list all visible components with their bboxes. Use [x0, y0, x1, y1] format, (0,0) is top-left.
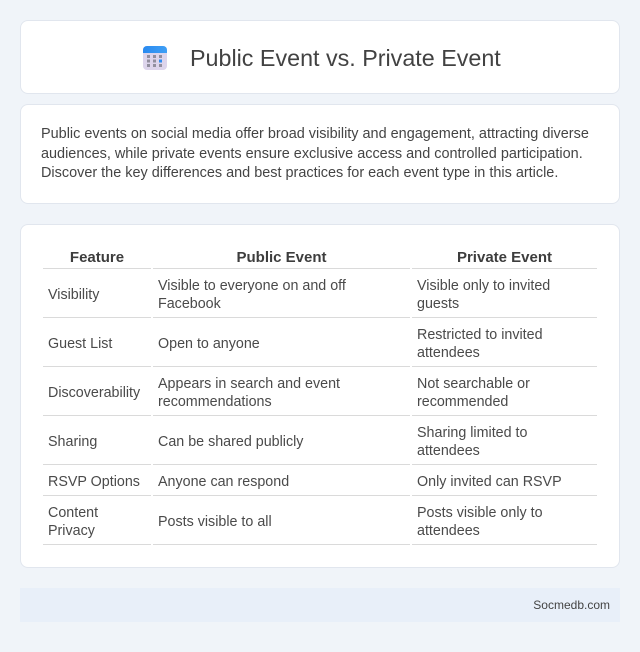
comparison table: Facebook	[158, 296, 221, 312]
header: Private Event: Private Event	[457, 249, 552, 266]
comparison table: recommended	[417, 394, 508, 410]
comparison table: Posts visible only to	[417, 505, 543, 521]
intro panel	[20, 104, 620, 204]
title panel	[20, 20, 620, 94]
comparison table: Visible to everyone on and off	[158, 278, 346, 294]
comparison table: Can be shared publicly	[158, 434, 303, 450]
header: Public Event: Public Event	[236, 249, 327, 266]
icon: calendar	[143, 46, 167, 70]
intro text	[41, 126, 589, 181]
intro text: Public events on social media offer broad visibility and engagement, attracting diverse	[41, 126, 589, 142]
panel: comparison table	[20, 224, 620, 568]
row: Sharing: Sharing	[48, 434, 97, 450]
header: Feature: Feature	[70, 249, 124, 266]
comparison table: Sharing limited to	[417, 425, 527, 441]
comparison table: Open to anyone	[158, 336, 260, 352]
comparison table: Anyone can respond	[158, 474, 289, 490]
row: Visibility: Visibility	[48, 287, 99, 303]
row: Guest List: Guest List	[48, 336, 112, 352]
row: Content Privacy: Content	[48, 505, 98, 521]
comparison table: recommendations	[158, 394, 272, 410]
comparison table: Posts visible to all	[158, 514, 272, 530]
comparison table: attendees	[417, 443, 480, 459]
row: Content Privacy: Privacy	[48, 523, 95, 539]
footer bar	[20, 588, 620, 622]
intro text: Discover the key differences and best practices for each event type in this article.	[41, 165, 558, 181]
title: Public Event vs. Private Event	[190, 45, 501, 71]
row: RSVP Options: RSVP Options	[48, 474, 140, 490]
comparison table: Not searchable or	[417, 376, 530, 392]
comparison table: Visible only to invited	[417, 278, 550, 294]
footer source: Socmedb.com	[533, 598, 610, 612]
comparison table: attendees	[417, 523, 480, 539]
comparison table: Restricted to invited	[417, 327, 543, 343]
comparison table: attendees	[417, 345, 480, 361]
comparison table: guests	[417, 296, 459, 312]
row: Content Privacy	[48, 505, 98, 539]
comparison table: Only invited can RSVP	[417, 474, 562, 490]
comparison table: Appears in search and event	[158, 376, 340, 392]
row: Discoverability: Discoverability	[48, 385, 140, 401]
intro text: audiences, while private events ensure exclusive access and controlled participation.	[41, 146, 583, 162]
